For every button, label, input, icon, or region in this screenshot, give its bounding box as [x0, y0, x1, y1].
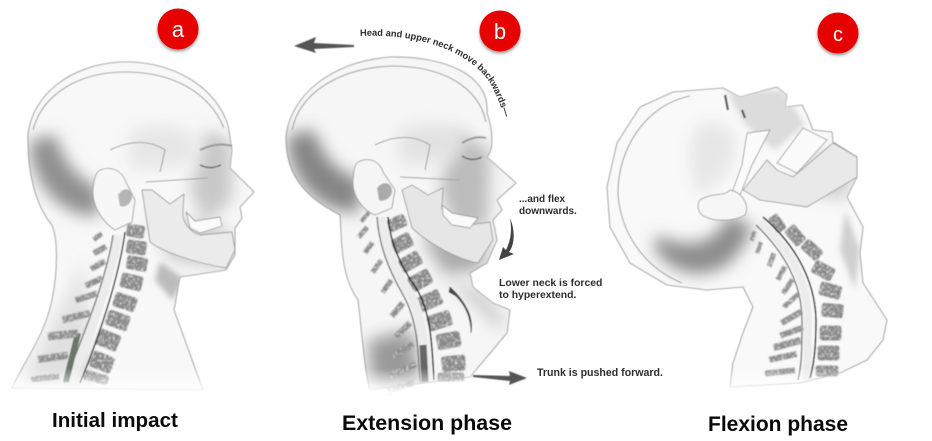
spinal cord a: [64, 232, 125, 383]
annotation: and flex downwards: [519, 194, 577, 217]
annotation: and flex downwards: downwards.: [519, 206, 577, 217]
teeth c: [777, 128, 827, 173]
head b shading: [288, 124, 505, 388]
badge b: [480, 10, 520, 52]
ear b: [353, 160, 395, 215]
spinous processes c: [750, 231, 804, 377]
eye b: [462, 156, 482, 160]
annotation: lower neck: Lower neck is forced: [499, 278, 602, 289]
illustration a: head and neck at initial impact: [12, 62, 254, 390]
annotation: lower neck: to hyperextend.: [499, 290, 576, 301]
spinous processes a: [31, 232, 108, 382]
head c shading: [655, 90, 860, 290]
annotation: trunk pushed: Trunk is pushed forward.: [537, 367, 663, 379]
caption: extension phase: Extension phase: [342, 411, 512, 435]
head a outline: [12, 62, 254, 390]
badge c: c: [833, 24, 843, 46]
ear canal a: [118, 189, 132, 207]
illustration b: head and neck in extension phase: [286, 57, 516, 394]
cheekbone b: [375, 138, 460, 180]
jaw c: [743, 143, 857, 207]
eye a: [200, 165, 221, 168]
cheekbone a: [110, 142, 208, 182]
arrow: flex downward: [499, 218, 514, 260]
cheekbone c: [730, 130, 770, 198]
ear canal b: [377, 183, 392, 201]
skull inner line b: [292, 66, 486, 130]
badge c: [818, 12, 858, 54]
brow a: [200, 144, 232, 150]
teeth a: [186, 212, 222, 233]
curved arrow: lower neck up: [449, 287, 472, 333]
arrow: head moves backward: [294, 37, 354, 53]
brow b: [462, 137, 486, 143]
ear a: [93, 168, 135, 230]
annotation: and flex downwards: ...and flex: [519, 194, 566, 205]
badge b: b: [494, 19, 506, 44]
vertebrae b: [386, 214, 466, 381]
illustration c: head and neck in flexion phase: [607, 87, 887, 387]
teeth b: [442, 205, 478, 228]
ear c: [698, 190, 747, 220]
caption: flexion phase: Flexion phase: [708, 413, 848, 436]
spinous processes b: [357, 211, 417, 394]
badge a: [158, 8, 198, 50]
skull inner line c: [618, 96, 690, 283]
arrow: trunk forward: [473, 371, 527, 385]
bottom fade of the illustrations: [0, 368, 932, 394]
spinal cord b: [377, 217, 434, 382]
skull inner line a: [33, 72, 224, 130]
badge a: a: [172, 17, 185, 42]
head a shading: [20, 125, 232, 385]
head b outline: [286, 57, 516, 390]
head c outline: [607, 87, 887, 387]
jaw a: [142, 190, 235, 268]
vertebrae c: [768, 214, 843, 376]
spinal cord c: [756, 217, 816, 380]
vertebrae a: [83, 224, 148, 385]
caption: initial impact: Initial impact: [52, 409, 178, 432]
jaw b: [402, 185, 493, 263]
annotation: lower neck: [499, 278, 602, 301]
annotation: head and upper neck: Head and upper neck move backwards—: [360, 29, 508, 116]
orbit c: [725, 95, 745, 118]
